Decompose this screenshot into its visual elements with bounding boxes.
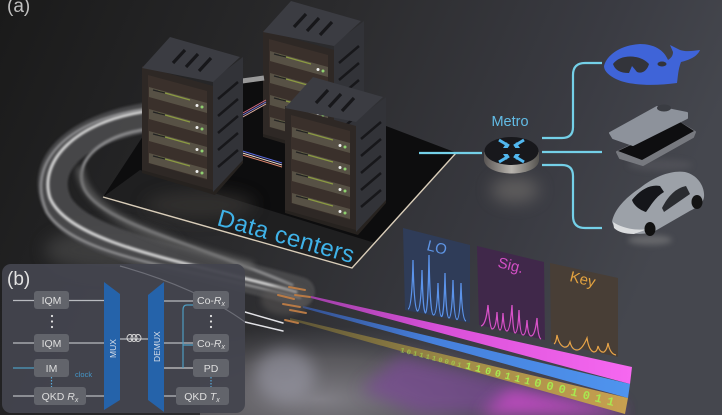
metro network lines — [419, 63, 602, 228]
spectrum panel: LO — [403, 228, 470, 323]
ellipsis dots — [51, 315, 212, 328]
fiber connectors — [245, 285, 310, 331]
spectrum panel: Sig — [477, 246, 545, 340]
fiber streak over panel — [120, 266, 245, 322]
beam: local oscillator — [303, 306, 630, 398]
panel (b): system diagram — [2, 264, 245, 413]
spectrum panel: LO: LO — [425, 237, 449, 259]
right module labels: x — [215, 397, 220, 404]
floor glow and reflections — [200, 177, 622, 415]
left module labels — [42, 295, 79, 404]
right module labels: QKD T — [184, 391, 216, 403]
fiber loop — [41, 109, 300, 298]
dashed sync arrows — [52, 377, 211, 387]
left module labels: IQM — [42, 295, 61, 307]
server: left rack — [142, 37, 243, 195]
platform — [103, 78, 457, 268]
server: back rack — [263, 1, 364, 159]
spectrum panel: Key: Key — [568, 268, 598, 291]
demux label: DEMUX — [152, 331, 162, 362]
icon: smartphone — [610, 104, 695, 171]
right module labels: Co-R — [197, 295, 222, 307]
right module labels: x — [221, 301, 226, 308]
spectrum panel: Key — [550, 263, 618, 357]
metro label: Metro — [491, 114, 529, 130]
icon: car — [612, 172, 704, 245]
key bit string: 1 0 1 1 1 1 0 0 0 1 1 1 0 0 1 1 1 0 0 0 1 0 1 1 — [399, 342, 616, 410]
right module labels: PD — [204, 363, 219, 375]
left module boxes — [34, 291, 86, 405]
right module boxes — [176, 291, 229, 405]
signal lines — [13, 300, 193, 396]
icon: whale — [604, 44, 700, 85]
metro router icon — [484, 137, 539, 174]
right module labels: Co-R — [197, 338, 222, 350]
fiber coil — [127, 334, 141, 342]
inter-server wires — [226, 78, 282, 167]
demux — [148, 282, 164, 412]
left module labels: IM — [46, 363, 57, 375]
data centers label: Data centers — [214, 205, 357, 269]
left module labels: x — [74, 397, 79, 404]
left module labels: QKD R — [42, 391, 75, 403]
server: front rack — [285, 77, 386, 235]
left module labels: IQM — [42, 338, 61, 350]
fiber shadow below loop — [45, 228, 175, 272]
mux — [104, 282, 120, 410]
beam: key bits — [290, 318, 628, 414]
mux label: MUX — [108, 339, 118, 358]
clock label: clock — [75, 370, 92, 379]
right module labels: x — [221, 344, 226, 351]
spectrum panel: Sig: Sig. — [496, 254, 525, 277]
panel label: (b) — [7, 269, 30, 290]
right module labels — [184, 295, 226, 404]
beam: signal — [311, 296, 632, 384]
